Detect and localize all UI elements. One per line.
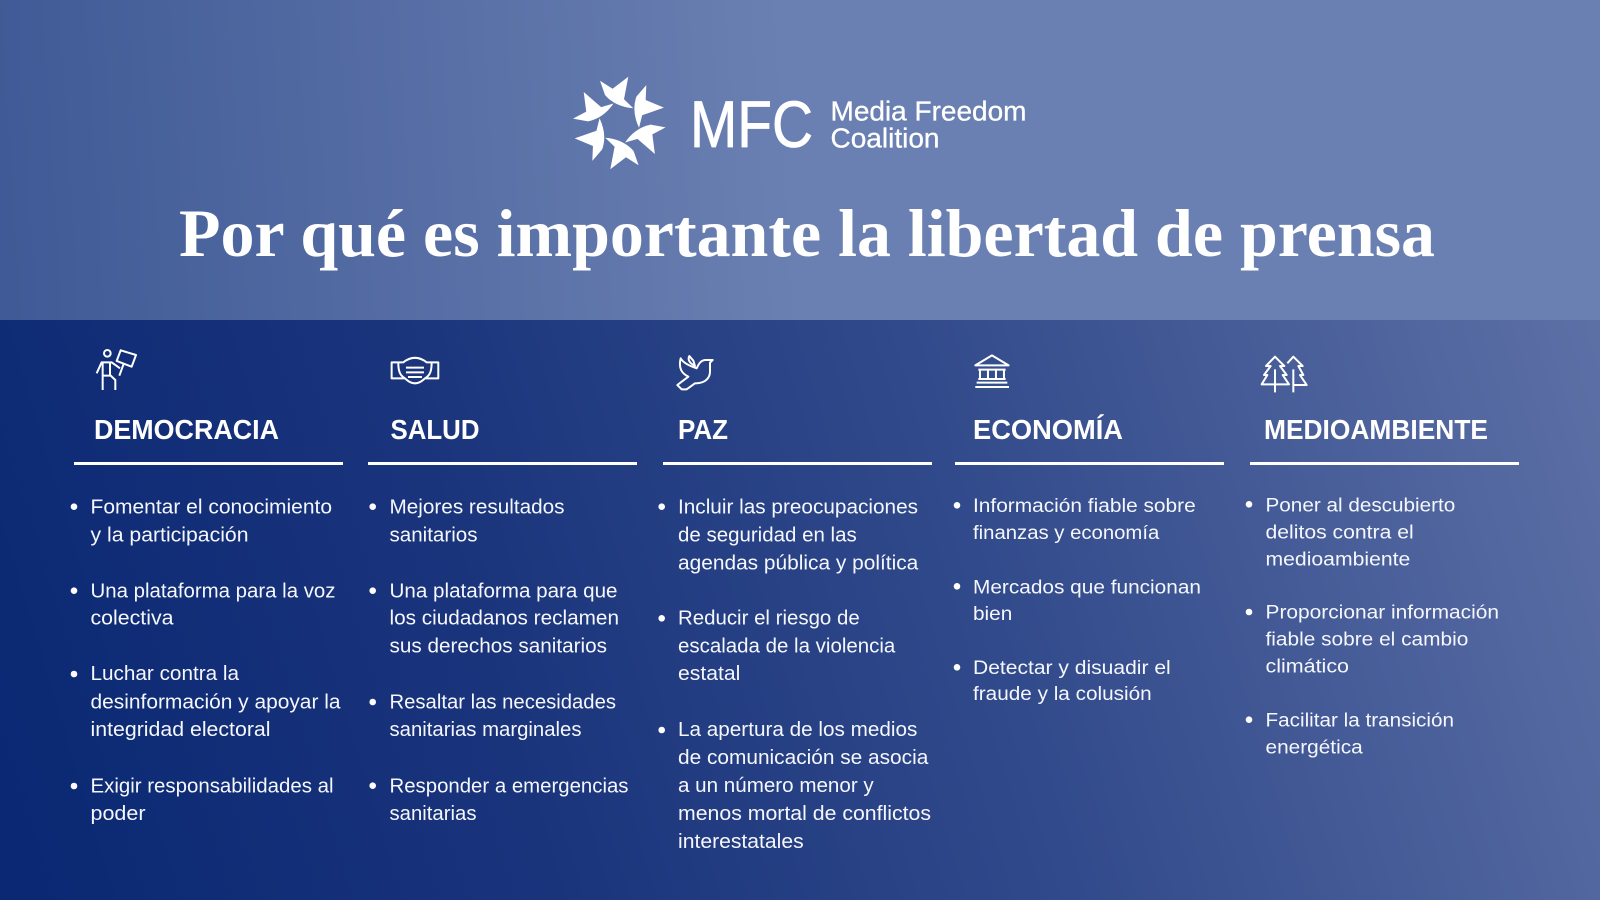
list: salud: sanitarias marginales: [390, 719, 582, 741]
list: paz: La apertura de los medios: [678, 719, 917, 741]
logo: Media Freedom Coalition: [570, 77, 1026, 169]
heading: economía: ECONOMÍA: [973, 414, 1123, 445]
list: medioambiente: medioambiente: [1266, 548, 1410, 570]
icon: face mask: [392, 358, 438, 383]
list: medioambiente: energética: [1266, 736, 1363, 758]
list: medioambiente: fiable sobre el cambio: [1266, 628, 1468, 650]
list: democracia: [71, 496, 341, 825]
list: salud: sus derechos sanitarios: [390, 635, 607, 657]
list: paz: menos mortal de conflictos: [678, 803, 931, 825]
list: paz: Incluir las preocupaciones: [678, 496, 918, 518]
list: salud: los ciudadanos reclamen: [390, 607, 619, 629]
list: salud: Resaltar las necesidades: [390, 691, 616, 713]
icon: two pine trees: [1262, 357, 1307, 392]
list: democracia: poder: [90, 803, 146, 825]
list: economía: Mercados que funcionan: [973, 576, 1201, 598]
list: medioambiente: climático: [1266, 655, 1349, 677]
list: salud: sanitarias: [390, 803, 476, 825]
panel: content background: [0, 320, 1600, 900]
list: paz: Reducir el riesgo de: [678, 607, 860, 629]
list: paz: de seguridad en las: [678, 524, 857, 546]
list: democracia: colectiva: [90, 607, 174, 629]
heading: democracia: DEMOCRACIA: [94, 414, 279, 445]
list: salud: Una plataforma para que: [390, 580, 618, 602]
list: paz: [658, 496, 931, 853]
panel: economía: [954, 355, 1224, 705]
list: economía: [954, 495, 1201, 705]
list: salud: Responder a emergencias: [390, 775, 628, 797]
panel: header background: [0, 0, 1600, 320]
list: medioambiente: delitos contra el: [1266, 521, 1414, 543]
icon: protester with sign: [97, 350, 136, 390]
list: democracia: desinformación y apoyar la: [90, 691, 341, 713]
list: economía: bien: [973, 603, 1012, 625]
list: paz: escalada de la violencia: [678, 635, 896, 657]
logo name: Media Freedom Coalition: Coalition: [830, 122, 940, 153]
panel: paz: [658, 356, 932, 853]
list: medioambiente: Facilitar la transición: [1266, 709, 1454, 731]
list: paz: agendas pública y política: [678, 552, 919, 574]
list: economía: fraude y la colusión: [973, 683, 1152, 705]
panel: democracia: [71, 350, 343, 825]
panel: medioambiente: [1246, 357, 1519, 758]
list: medioambiente: Proporcionar información: [1266, 601, 1499, 623]
panel: salud: [368, 358, 637, 825]
list: democracia: Una plataforma para la voz: [90, 580, 336, 602]
list: economía: finanzas y economía: [973, 522, 1159, 544]
list: democracia: Fomentar el conocimiento: [90, 496, 332, 518]
list: democracia: integridad electoral: [90, 719, 270, 741]
list: medioambiente: Poner al descubierto: [1266, 494, 1455, 516]
list: democracia: y la participación: [90, 524, 248, 546]
list: salud: [369, 496, 628, 825]
list: paz: de comunicación se asocia: [678, 747, 929, 769]
list: salud: Mejores resultados: [390, 496, 564, 518]
list: paz: a un número menor y: [678, 775, 874, 797]
title: Por qué es importante la libertad de prensa: [179, 195, 1435, 271]
icon: ring of six doves: [570, 77, 669, 169]
icon: bank building: [975, 355, 1009, 387]
list: paz: interestatales: [678, 831, 804, 853]
logo name: Media Freedom Coalition: Media Freedom: [830, 96, 1026, 127]
list: democracia: Luchar contra la: [90, 663, 240, 685]
list: economía: Información fiable sobre: [973, 495, 1196, 517]
list: salud: sanitarios: [390, 524, 478, 546]
heading: medioambiente: MEDIOAMBIENTE: [1264, 414, 1488, 445]
heading: salud: SALUD: [390, 414, 480, 445]
list: economía: Detectar y disuadir el: [973, 657, 1171, 679]
logo wordmark: MFC: MFC: [690, 87, 813, 161]
logo name: Media Freedom Coalition: [830, 96, 1026, 153]
heading: paz: PAZ: [678, 414, 728, 445]
icon: dove: [677, 356, 713, 389]
list: paz: estatal: [678, 663, 740, 685]
list: democracia: Exigir responsabilidades al: [90, 775, 334, 797]
list: medioambiente: [1246, 494, 1499, 758]
